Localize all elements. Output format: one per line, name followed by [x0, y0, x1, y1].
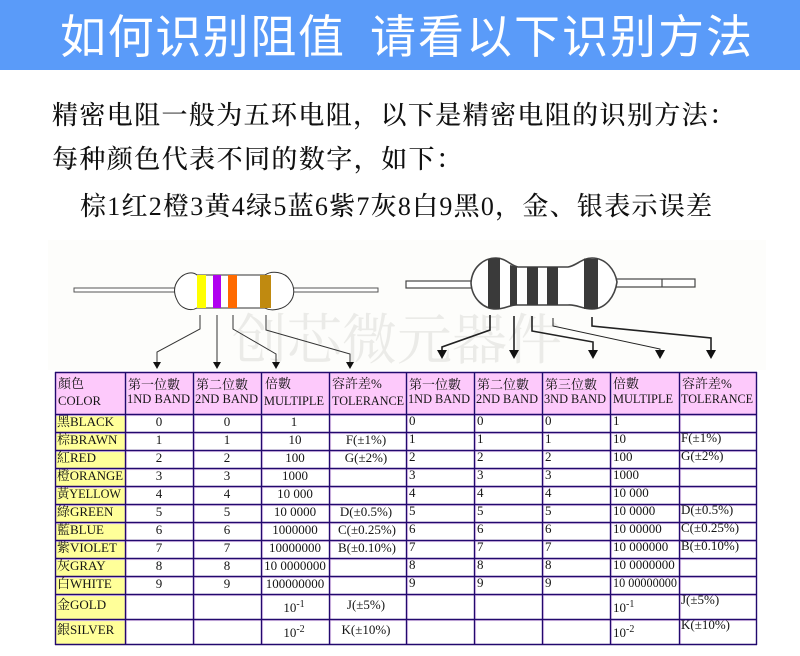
left table digit values: 10 — [283, 600, 296, 615]
left table digit values: 10 — [283, 625, 296, 640]
right table digit values: 0 — [545, 413, 552, 428]
right table digit values: F(±1%) — [681, 430, 721, 445]
right table digit values: 2 — [545, 449, 552, 464]
right table digit values: 1 — [545, 431, 552, 446]
table header labels: MULTIPLE — [613, 391, 673, 406]
left table digit values: -2 — [296, 624, 305, 635]
right table digit values: K(±10%) — [681, 617, 730, 632]
right table digit values: 3 — [477, 467, 484, 482]
right table digit values: 4 — [477, 485, 484, 500]
colour name column: 藍BLUE — [57, 522, 104, 537]
table header labels: 2ND BAND — [195, 391, 258, 406]
table header labels: 第二位數 — [477, 377, 529, 392]
table header labels: MULTIPLE — [264, 393, 324, 408]
colour name column: 黑BLACK — [57, 414, 115, 429]
icon: photographed resistor — [406, 258, 695, 309]
left table digit values: 100 — [285, 450, 305, 465]
right table digit values: 100 — [613, 449, 632, 464]
table header labels: 顏色 — [58, 376, 84, 391]
arrows: photographed resistor to right table — [437, 315, 716, 359]
left table digit values: K(±10%) — [341, 622, 391, 637]
right table digit values: 5 — [545, 503, 552, 518]
colour name column: 紅RED — [57, 450, 96, 465]
left table digit values: 0 — [156, 414, 162, 429]
right table digit values: 10 0000 — [613, 503, 655, 518]
colour name column: 黃YELLOW — [57, 486, 122, 501]
left table digit values: 4 — [224, 486, 231, 501]
left table digit values: 10 — [288, 432, 302, 447]
right table digit values: B(±0.10%) — [681, 538, 739, 553]
colour name column: 金GOLD — [57, 597, 106, 612]
colour name column: 棕BRAWN — [57, 432, 118, 447]
left table digit values: 10 0000 — [274, 504, 316, 519]
left table digit values: B(±0.10%) — [338, 540, 396, 555]
left table digit values: 1000000 — [272, 522, 318, 537]
right table digit values: 3 — [409, 467, 416, 482]
right table digit values: 10 0000000 — [613, 557, 675, 572]
table header labels: 倍數 — [265, 376, 291, 391]
table header labels: 容許差% — [682, 376, 732, 391]
right table digit values: 4 — [409, 485, 416, 500]
left table digit values: -1 — [296, 599, 305, 610]
right table digit values: 6 — [409, 521, 416, 536]
right table digit values: 10 000000 — [613, 539, 668, 554]
colour name column: 綠GREEN — [57, 504, 114, 519]
left table digit values: 3 — [156, 468, 162, 483]
right table digit values: 5 — [477, 503, 484, 518]
left table digit values: 1 — [291, 414, 297, 429]
right table digit values: G(±2%) — [681, 448, 724, 463]
table header labels: 2ND BAND — [476, 391, 538, 406]
left table digit values: 1000 — [282, 468, 308, 483]
left table digit values: 10 0000000 — [264, 558, 326, 573]
right table digit values: 6 — [477, 521, 484, 536]
left table digit values — [156, 414, 396, 640]
table header labels: TOLERANCE — [681, 391, 753, 406]
left table digit values: C(±0.25%) — [338, 522, 396, 537]
right table digit values: 1000 — [613, 467, 639, 482]
left table digit values: 7 — [156, 540, 163, 555]
left table digit values: 9 — [224, 576, 230, 591]
left table digit values: 1 — [224, 432, 230, 447]
colour name column: 白WHITE — [57, 576, 112, 591]
table header labels: 3ND BAND — [544, 391, 606, 406]
right table digit values: 2 — [409, 449, 416, 464]
left table digit values: 2 — [224, 450, 230, 465]
left table digit values: 5 — [156, 504, 162, 519]
left table digit values: F(±1%) — [346, 432, 386, 447]
left table digit values: 5 — [224, 504, 230, 519]
right table digit values: 9 — [477, 575, 484, 590]
right table digit values: 7 — [545, 539, 552, 554]
left table digit values: 8 — [224, 558, 230, 573]
right table digit values: -1 — [626, 599, 634, 610]
right table digit values: 5 — [409, 503, 416, 518]
table header labels: 容許差% — [332, 376, 382, 391]
arrows: colour resistor to left table — [153, 315, 354, 369]
title banner — [0, 0, 800, 70]
right table digit values: J(±5%) — [681, 592, 719, 607]
left table digit values: 2 — [156, 450, 162, 465]
intro text: colours stand for digits: 每种颜色代表不同的数字，如下： — [52, 145, 462, 174]
right table digit values: 8 — [409, 557, 416, 572]
right table digit values: 2 — [477, 449, 484, 464]
table header labels: COLOR — [58, 393, 101, 408]
right table digit values: 0 — [409, 413, 416, 428]
colour name column: 橙ORANGE — [57, 468, 123, 483]
table header labels: 1ND BAND — [408, 391, 470, 406]
left table digit values: 8 — [156, 558, 162, 573]
right table digit values: 3 — [545, 467, 552, 482]
left table digit values: 1 — [156, 432, 162, 447]
left table digit values: 7 — [224, 540, 231, 555]
table header labels: 第三位數 — [545, 377, 597, 392]
left table digit values: 0 — [224, 414, 230, 429]
right table digit values: 8 — [545, 557, 552, 572]
right table digit values: C(±0.25%) — [681, 520, 739, 535]
intro text: five-band resistor: 精密电阻一般为五环电阻，以下是精密电阻的识别方法： — [52, 101, 735, 130]
right table digit values: 7 — [409, 539, 416, 554]
right table digit values — [409, 413, 739, 640]
right table digit values: 10 00000000 — [613, 575, 677, 590]
left table digit values: 3 — [224, 468, 230, 483]
right table digit values: 1 — [409, 431, 416, 446]
right table digit values: -2 — [626, 624, 634, 635]
left table digit values: 9 — [156, 576, 162, 591]
left table digit values: D(±0.5%) — [340, 504, 392, 519]
colour name column: 紫VIOLET — [57, 540, 117, 555]
table header labels — [58, 376, 753, 408]
table header labels: 第一位數 — [128, 377, 180, 392]
right table digit values: 10 — [613, 431, 626, 446]
table header labels: 1ND BAND — [127, 391, 190, 406]
right table digit values: 7 — [477, 539, 484, 554]
table header labels: 倍數 — [613, 376, 639, 391]
diagram background — [48, 240, 766, 370]
left table digit values: 6 — [156, 522, 163, 537]
right table digit values: 8 — [477, 557, 484, 572]
left table digit values: 4 — [156, 486, 163, 501]
left table digit values: 100000000 — [266, 576, 324, 591]
left table digit values: J(±5%) — [347, 597, 385, 612]
right table digit values: 1 — [477, 431, 484, 446]
right table digit values: 0 — [477, 413, 484, 428]
icon: colour band resistor — [74, 272, 378, 310]
right table digit values: 10 — [613, 600, 626, 615]
right table digit values: 9 — [545, 575, 552, 590]
right table digit values: 10 00000 — [613, 521, 662, 536]
colour code list: 棕1红2橙3黄4绿5蓝6紫7灰8白9黑0，金、银表示误差 — [80, 192, 712, 221]
right table digit values: 1 — [613, 413, 620, 428]
colour name column: 灰GRAY — [57, 558, 106, 573]
colour name column — [57, 414, 123, 637]
right table digit values: 4 — [545, 485, 552, 500]
right table digit values: 6 — [545, 521, 552, 536]
left table digit values: 10000000 — [269, 540, 321, 555]
table header labels: 第二位數 — [196, 377, 248, 392]
colour table background and grid — [55, 372, 757, 645]
table header labels: 第一位數 — [409, 377, 461, 392]
title banner: 如何识别阻值 — [60, 11, 344, 63]
right table digit values: 10 — [613, 625, 626, 640]
right table digit values: D(±0.5%) — [681, 502, 733, 517]
left table digit values: 10 000 — [277, 486, 313, 501]
table header labels: TOLERANCE — [332, 393, 404, 408]
left table digit values: G(±2%) — [345, 450, 387, 465]
left table digit values: 6 — [224, 522, 231, 537]
title banner: 请看以下识别方法 — [370, 11, 752, 63]
colour name column: 銀SILVER — [57, 622, 115, 637]
watermark: 创芯微元器件 — [232, 310, 562, 371]
right table digit values: 9 — [409, 575, 416, 590]
right table digit values: 10 000 — [613, 485, 649, 500]
